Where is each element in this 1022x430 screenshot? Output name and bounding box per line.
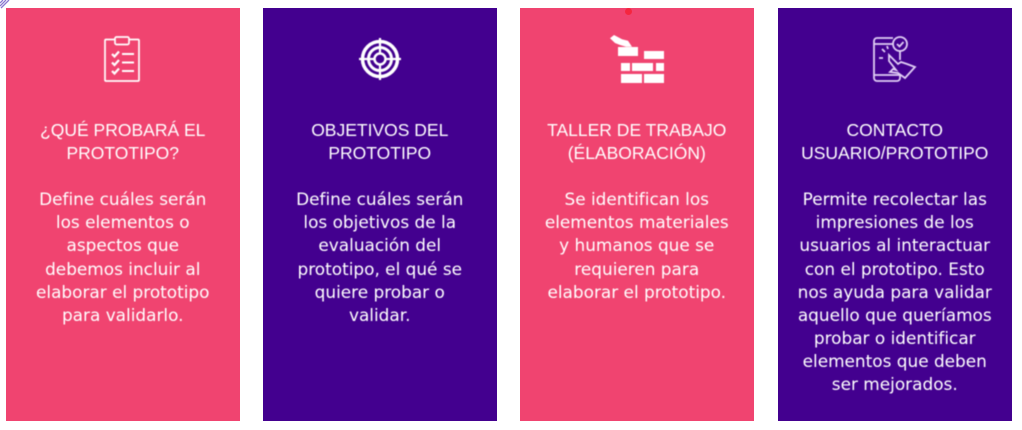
text block: con el prototipo. Esto [805,259,985,279]
text block: elementos que deben [803,351,987,371]
text block: quiere probar o [315,282,445,302]
heading: CONTACTO [846,120,943,140]
heading [40,120,206,163]
text block: probar o identificar [814,328,976,348]
icon: phone touch [872,35,917,83]
text block: validar. [349,305,411,325]
icon: clipboard checklist [103,35,141,83]
heading: TALLER DE TRABAJO [547,120,726,140]
heading: PROTOTIPO? [66,143,179,163]
text block: los elementos o [56,212,190,232]
text block: Permite recolectar las [803,189,987,209]
marker: red dot [625,8,632,15]
text block: ser mejorados. [832,374,958,394]
heading: PROTOTIPO [328,143,431,163]
panel: contacto [778,8,1012,420]
heading: (ÉLABORACIÓN) [568,143,706,163]
heading [311,120,449,163]
icon: target [358,37,402,81]
text block: Se identifican los [564,189,709,209]
text block: prototipo, el qué se [297,259,462,279]
text block: para validarlo. [62,305,184,325]
text block: elaborar el prototipo. [547,282,726,302]
text block: elaborar el prototipo [36,282,210,302]
panel: objetivos [263,8,496,420]
text block: nos ayuda para validar [798,282,992,302]
heading: OBJETIVOS DEL [311,120,448,140]
text block: requieren para [574,259,699,279]
text block: usuarios al interactuar [799,235,990,255]
text block [545,189,729,302]
heading [801,120,988,163]
icon: brick wall and hand [610,34,665,84]
text block: aquello que queríamos [798,305,992,325]
text block [798,189,993,394]
text block: aspectos que [66,235,179,255]
text block [296,189,463,325]
panel: taller de trabajo [520,8,754,420]
text block: debemos incluir al [45,259,200,279]
text block: Define cuáles serán [296,189,463,209]
heading: USUARIO/PROTOTIPO [801,143,988,163]
text block: evaluación del [318,235,441,255]
text block: impresiones de los [816,212,974,232]
text block: los objetivos de la [303,212,456,232]
panel: qué probará [6,8,240,420]
decoration: corner stripes [0,0,10,8]
text block [36,189,210,326]
heading: ¿QUÉ PROBARÁ EL [40,120,205,140]
heading [546,120,726,164]
text block: y humanos que se [559,235,714,255]
text block: elementos materiales [545,212,729,232]
text block: Define cuáles serán [39,189,206,209]
